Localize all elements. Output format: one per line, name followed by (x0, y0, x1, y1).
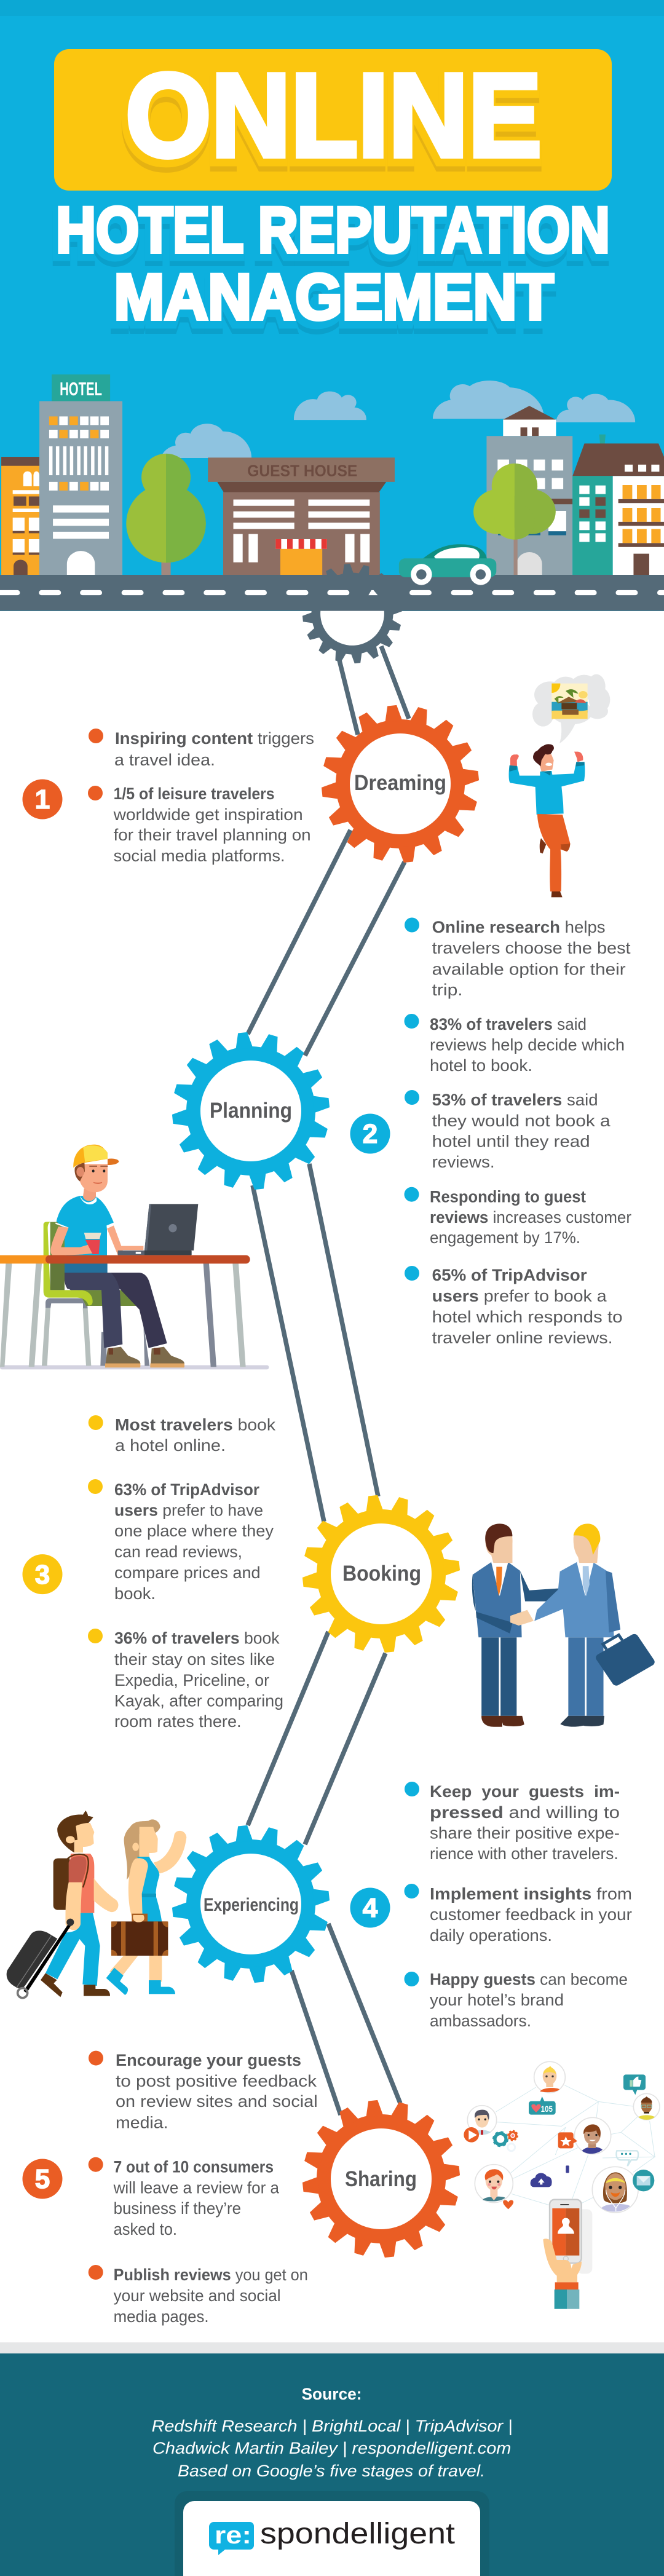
gear: Planning: Planning (210, 1099, 292, 1123)
panel: Booking text: a hotel online. (115, 1436, 226, 1455)
panel: Sharing text: media pages. (114, 2307, 209, 2326)
speech dots (616, 2151, 638, 2166)
panel: Planning text: 53% of travelers said (432, 1091, 598, 1109)
footer strip and background (0, 2342, 664, 2576)
panel: Dreaming text (88, 729, 314, 865)
panel: Sharing text: on review sites and social (116, 2092, 318, 2111)
man (539, 754, 554, 772)
panel: Sharing text: will leave a review for a (113, 2179, 280, 2197)
orange building (1, 457, 39, 575)
number badge 2: 2 (363, 1119, 377, 1149)
panel: Dreaming text: social media platforms. (114, 847, 285, 865)
cloud upload (531, 2173, 552, 2187)
panel: Dreaming text: 1/5 of leisure travelers (114, 784, 275, 803)
panel: Dreaming text: a travel idea. (114, 751, 215, 769)
panel: Booking text: Kayak, after comparing (114, 1692, 283, 1710)
mail badge (633, 2170, 654, 2191)
number badge 5: 5 (35, 2164, 50, 2194)
number badge 1 (22, 780, 63, 819)
title panel: ONLINE: ONLINE (123, 57, 540, 190)
guest house (223, 492, 380, 575)
panel: Experiencing text: Keep your guests im- (430, 1782, 620, 1801)
near arm (50, 1227, 97, 1255)
panel: Planning text (405, 917, 631, 1347)
logo panel (175, 2491, 489, 2576)
woman (124, 1819, 160, 1879)
panel: Booking text: Expedia, Priceline, or (114, 1671, 269, 1689)
gear: Dreaming: Dreaming (354, 771, 446, 795)
panel: Sharing text (89, 2051, 318, 2326)
gear: Sharing (294, 2092, 468, 2266)
panel: Sharing text: business if they’re (114, 2199, 241, 2218)
panel: Booking text: 36% of travelers book (114, 1629, 280, 1648)
panel: Booking text: Most travelers book (115, 1415, 276, 1434)
hotel tower (52, 374, 110, 401)
source text: Redshift Research | BrightLocal | TripAdvisor | (152, 2417, 513, 2435)
panel: Booking text (88, 1415, 283, 1731)
source text: Source: (301, 2385, 362, 2403)
panel: Experiencing text: customer feedback in your (430, 1905, 632, 1924)
table legs (0, 1263, 12, 1367)
panel: Dreaming text: worldwide get inspiration (113, 805, 303, 824)
title: HOTEL REPUTATION MANAGEMENT: MANAGEMENT (112, 271, 551, 342)
panel: Booking text: one place where they (114, 1522, 274, 1540)
tree left (161, 559, 171, 575)
illustration: man at laptop (0, 1145, 269, 1369)
cityscape illustration: GUEST HOUSE (247, 462, 357, 480)
cityscape illustration (1, 374, 664, 575)
panel: Booking text: users prefer to have (114, 1501, 263, 1520)
gear: Planning (164, 1024, 338, 1198)
panel: Booking text: room rates there. (114, 1712, 242, 1731)
panel: Experiencing text: ambassadors. (430, 2012, 531, 2030)
gear: Experiencing: Experiencing (204, 1895, 299, 1915)
header background (0, 0, 664, 611)
panel: Planning text: reviews increases customer (430, 1208, 631, 1227)
panel: Planning text: hotel until they read (432, 1132, 590, 1151)
gear: Dreaming (314, 697, 487, 871)
dark haired man (473, 2130, 491, 2135)
panel: Planning text: users prefer to book a (432, 1287, 607, 1305)
panel: Planning text: travelers choose the best (432, 939, 631, 957)
panel: Planning text: 83% of travelers said (430, 1015, 587, 1033)
panel: Planning text: Online research helps (432, 918, 606, 936)
chain lines connecting gears (248, 646, 409, 2115)
number badge 4 (350, 1887, 390, 1928)
panel: Booking text: can read reviews, (114, 1543, 242, 1561)
logo wordmark: spondelligent (260, 2518, 455, 2550)
teal and white buildings (599, 435, 606, 449)
thumbs up bubble (623, 2074, 646, 2090)
title panel: ONLINE: ONLINE (125, 49, 542, 181)
hands (510, 1610, 534, 1626)
illustration: businessmen shaking hands (472, 1523, 656, 1727)
number badge 2 (350, 1114, 390, 1153)
legs (65, 1273, 167, 1348)
road and car (0, 544, 664, 611)
panel: Sharing text: asked to. (114, 2220, 177, 2238)
panel: Planning text: engagement by 17%. (430, 1228, 580, 1247)
panel: Planning text: reviews. (432, 1153, 495, 1171)
number badge 5 (22, 2159, 63, 2199)
panel: Sharing text: to post positive feedback (116, 2072, 317, 2090)
clouds (161, 381, 635, 458)
panel: Experiencing text: pressed and willing to (430, 1803, 620, 1822)
panel: Experiencing text: your hotel’s brand (430, 1991, 564, 2009)
laptop (144, 1204, 198, 1250)
tree right (514, 537, 518, 575)
number badge 3 (22, 1554, 63, 1594)
star badge and man (558, 2132, 574, 2148)
gear: Booking (294, 1487, 468, 1661)
panel: Planning text: hotel which responds to (432, 1308, 623, 1326)
gear: Booking: Booking (342, 1562, 421, 1586)
title panel: ONLINE: ONLINE (123, 52, 540, 184)
roller bag (23, 1924, 71, 1993)
title: HOTEL REPUTATION MANAGEMENT: MANAGEMENT (114, 261, 553, 333)
gear: start, under the road (298, 559, 407, 668)
panel: Sharing text: your website and social (114, 2286, 281, 2305)
gear: Experiencing (164, 1817, 338, 1991)
man (53, 1859, 69, 1910)
illustration: social network and phone (464, 2061, 660, 2309)
panel: Experiencing text: rience with other travelers. (430, 1844, 619, 1863)
panel: Booking text: book. (114, 1584, 156, 1603)
panel: Sharing text: 7 out of 10 consumers (114, 2158, 274, 2176)
panel: Experiencing text: Implement insights from (430, 1885, 632, 1903)
phone and hand (550, 2200, 582, 2263)
girl with headband (601, 2204, 630, 2212)
title: HOTEL REPUTATION MANAGEMENT (54, 194, 610, 342)
blond man (540, 2088, 559, 2092)
gears (495, 2133, 506, 2144)
likes badge (540, 2096, 545, 2101)
cityscape illustration: HOTEL (60, 378, 102, 400)
illustration: travelers with luggage (7, 1811, 186, 1998)
panel: Planning text: hotel to book. (430, 1056, 532, 1075)
panel: Planning text: available option for their (432, 960, 626, 979)
source text: Chadwick Martin Bailey | respondelligent.com (152, 2439, 511, 2457)
right buildings (503, 419, 556, 436)
chair (45, 1298, 88, 1308)
logo mark (209, 2522, 254, 2555)
body (57, 1196, 114, 1273)
table top (0, 1255, 49, 1263)
panel: Sharing text: Publish reviews you get on (114, 2266, 308, 2284)
left man (481, 1637, 516, 1716)
gear: Sharing: Sharing (345, 2167, 417, 2191)
panel: Planning text: reviews help decide which (430, 1036, 625, 1054)
right man (568, 1637, 604, 1716)
illustration: social network and phone: 105 (541, 2104, 553, 2114)
panel: Experiencing text: daily operations. (430, 1926, 552, 1945)
red haired woman (483, 2197, 505, 2202)
briefcase (591, 1627, 656, 1687)
title: HOTEL REPUTATION MANAGEMENT: MANAGEMENT (112, 266, 551, 337)
panel: Experiencing text: Happy guests can become (430, 1970, 628, 1988)
number badge 3: 3 (35, 1560, 50, 1590)
panel: Booking text: 63% of TripAdvisor (114, 1480, 259, 1499)
panel: Sharing text: Encourage your guests (116, 2051, 301, 2069)
play badge (464, 2127, 479, 2143)
panel: Planning text: trip. (432, 981, 463, 999)
number badge 4: 4 (363, 1893, 378, 1923)
source text: Based on Google’s five stages of travel. (178, 2462, 485, 2480)
panel: Sharing text: media. (116, 2114, 168, 2132)
illustration: dreaming man with thought bubble (509, 674, 610, 897)
panel: Booking text: compare prices and (114, 1563, 261, 1582)
avatars (467, 2061, 660, 2213)
panel: Experiencing text (405, 1782, 632, 2030)
panel: Planning text: they would not book a (432, 1112, 611, 1130)
panel: Experiencing text: share their positive expe- (430, 1823, 620, 1842)
glasses man (638, 2115, 655, 2120)
panel: Planning text: 65% of TripAdvisor (432, 1266, 587, 1284)
number badge 1: 1 (35, 784, 50, 815)
panel: Booking text: their stay on sites like (114, 1650, 275, 1669)
panel: Planning text: Responding to guest (430, 1188, 586, 1206)
panel: Planning text: traveler online reviews. (432, 1329, 613, 1347)
logo mark: re: (215, 2522, 251, 2549)
panel: Dreaming text: Inspiring content triggers (115, 729, 314, 748)
panel: Dreaming text: for their travel planning on (114, 826, 311, 844)
source text (152, 2385, 513, 2480)
